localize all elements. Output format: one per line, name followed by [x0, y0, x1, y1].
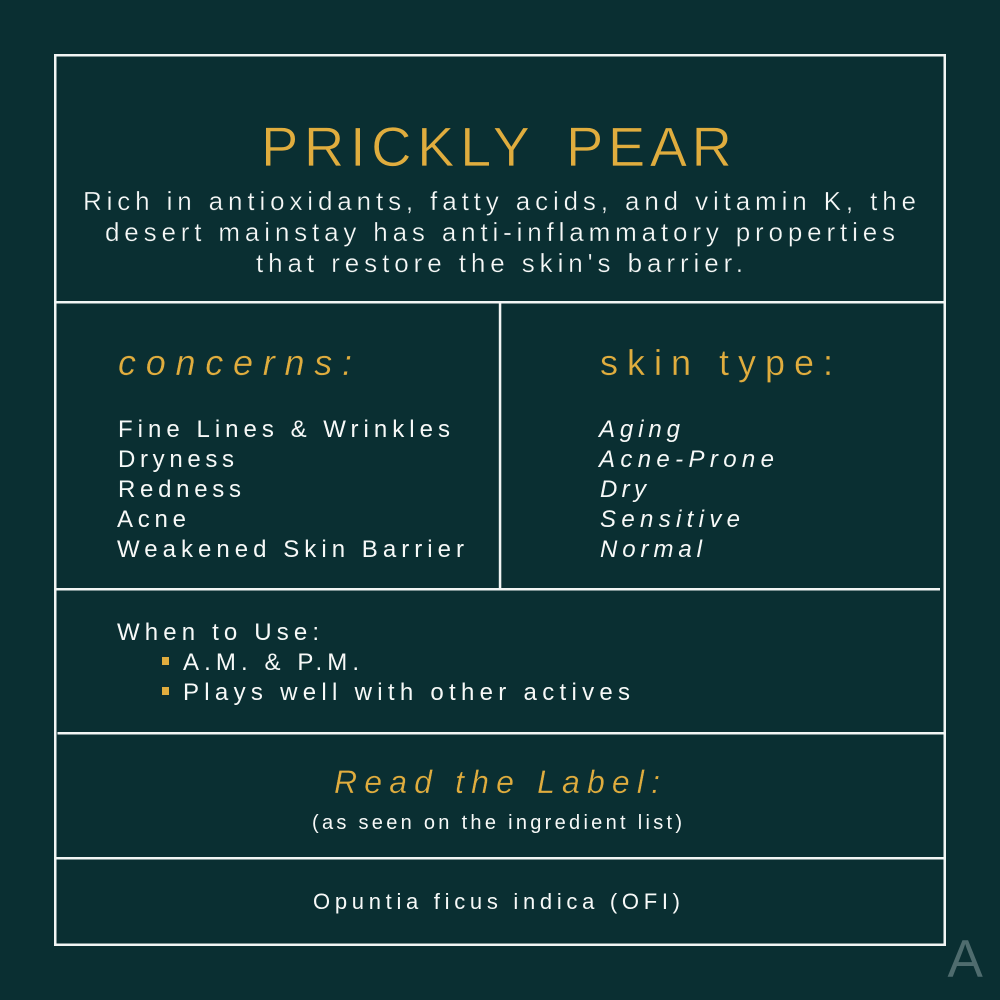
- skin type list: [597, 416, 774, 563]
- intro text: [83, 186, 916, 278]
- title: PEAR: [566, 115, 732, 178]
- panel: skin type: [597, 342, 833, 563]
- grid frame: [54, 54, 946, 946]
- skin type list: Normal: [600, 536, 703, 563]
- read the label heading: Read the Label:: [334, 764, 660, 800]
- skin type list: Acne-Prone: [597, 446, 774, 473]
- concerns list: Dryness: [118, 446, 234, 473]
- ingredient list note: (as seen on the ingredient list): [312, 812, 682, 834]
- concerns heading: concerns:: [118, 342, 352, 383]
- skin type heading: skin type:: [600, 342, 833, 383]
- intro text: that restore the skin's barrier.: [256, 248, 743, 278]
- concerns list: Fine Lines & Wrinkles: [118, 416, 450, 443]
- ingredient name: Opuntia ficus indica (OFI): [313, 889, 680, 914]
- concerns list: Acne: [117, 506, 186, 533]
- panel: when to use: [117, 619, 630, 706]
- bullet: A.M. & P.M.: A.M. & P.M.: [183, 649, 359, 676]
- panel: read the label: [312, 764, 682, 834]
- concerns list: Weakened Skin Barrier: [117, 536, 464, 563]
- concerns list: [117, 416, 464, 563]
- intro text: desert mainstay has anti-inflammatory properties: [105, 217, 895, 247]
- title: PRICKLY: [261, 115, 530, 178]
- panel: concerns: [117, 342, 464, 563]
- when to use heading: When to Use:: [117, 619, 319, 646]
- skin type list: Sensitive: [600, 506, 740, 533]
- watermark letter: A: [948, 930, 984, 988]
- bullet: plays well: Plays well with other actives: [183, 679, 630, 706]
- skin type list: Aging: [597, 416, 681, 443]
- concerns list: Redness: [118, 476, 241, 503]
- title: [261, 115, 732, 178]
- intro text: Rich in antioxidants, fatty acids, and vitamin K, the: [83, 186, 916, 216]
- skin type list: Dry: [600, 476, 648, 503]
